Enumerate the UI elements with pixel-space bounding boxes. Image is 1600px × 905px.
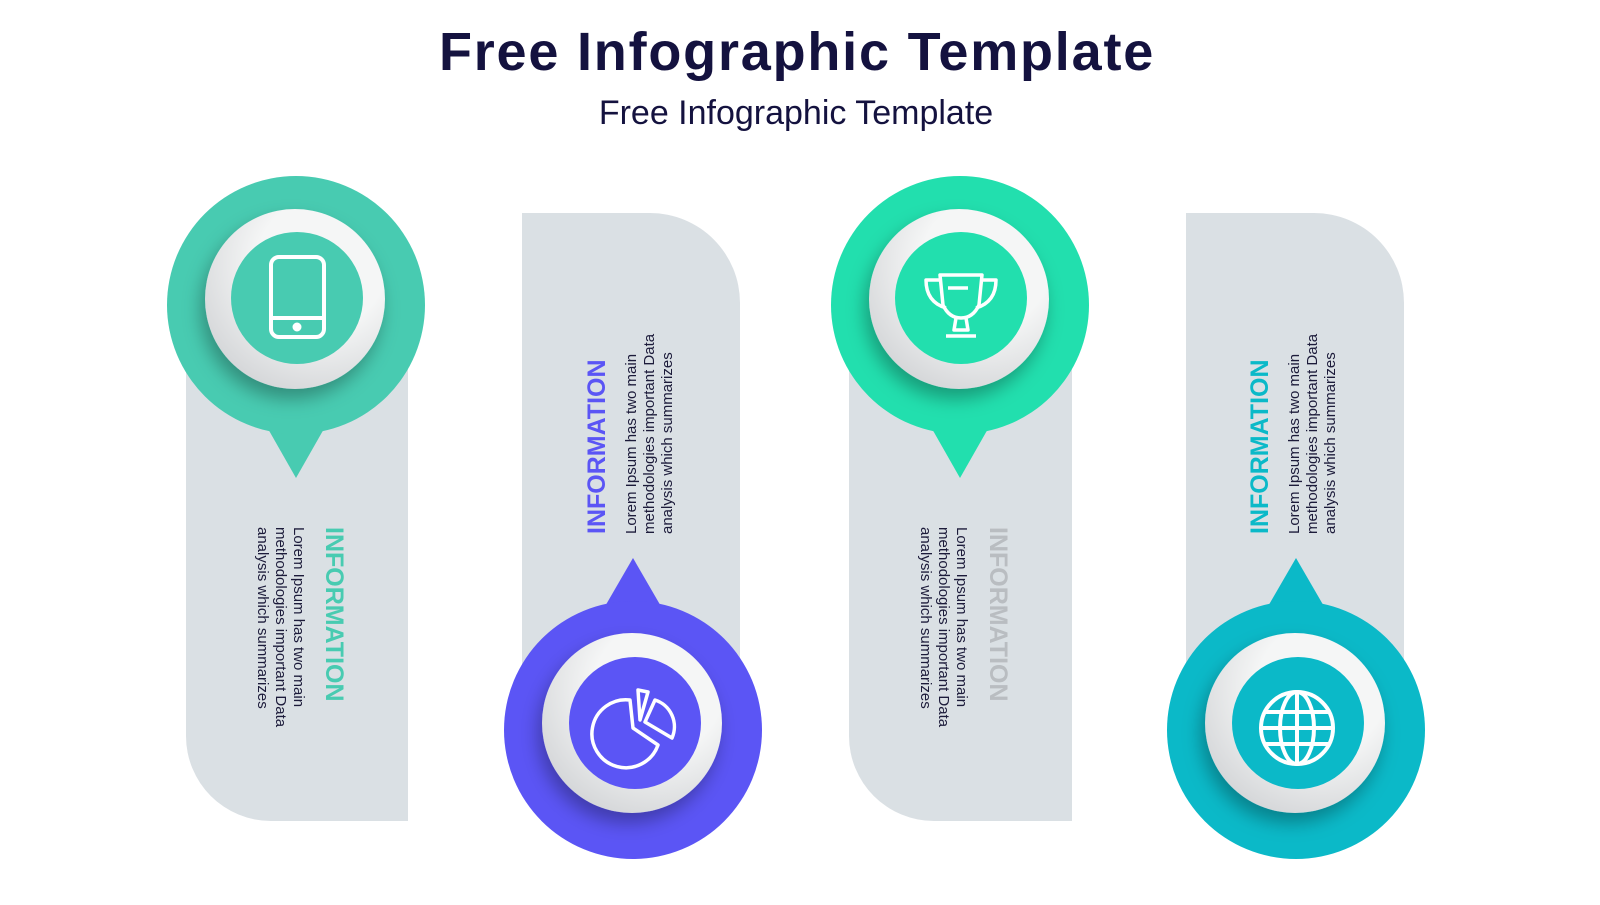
text 3: Lorem Ipsum has two main bbox=[953, 527, 970, 707]
text 2 bbox=[583, 333, 676, 534]
text 1: analysis which summarizes bbox=[254, 527, 271, 709]
text 2: analysis which summarizes bbox=[659, 352, 676, 534]
panel: card 1 bbox=[167, 176, 425, 821]
text 3: INFORMATION bbox=[984, 527, 1012, 702]
panel: card 4 bbox=[1167, 213, 1425, 859]
text 3: analysis which summarizes bbox=[917, 527, 934, 709]
icon: pie chart bbox=[592, 690, 674, 768]
panel: card 3 bbox=[831, 176, 1089, 821]
text 4: INFORMATION bbox=[1246, 359, 1274, 534]
icon: trophy bbox=[926, 275, 996, 336]
text 2: INFORMATION bbox=[583, 359, 611, 534]
marker 4 bbox=[1167, 558, 1425, 859]
icon: globe bbox=[1261, 692, 1333, 764]
text 1: Lorem Ipsum has two main bbox=[290, 527, 307, 707]
text 4: Lorem Ipsum has two main bbox=[1286, 354, 1303, 534]
text 4: methodologies important Data bbox=[1304, 333, 1321, 534]
text 1: INFORMATION bbox=[320, 527, 348, 702]
text 1 bbox=[254, 527, 348, 728]
text 3: methodologies important Data bbox=[935, 527, 952, 728]
icon: phone bbox=[271, 257, 324, 337]
text 4: analysis which summarizes bbox=[1322, 352, 1339, 534]
text 4 bbox=[1246, 333, 1339, 534]
text 2: Lorem Ipsum has two main bbox=[623, 354, 640, 534]
title: Free Infographic Template bbox=[439, 22, 1155, 82]
marker 2 bbox=[504, 558, 762, 859]
marker 3 bbox=[831, 176, 1089, 478]
panel: card 2 bbox=[504, 213, 762, 859]
text 1: methodologies important Data bbox=[272, 527, 289, 728]
subtitle: Free Infographic Template bbox=[599, 94, 993, 132]
text 2: methodologies important Data bbox=[641, 333, 658, 534]
text 3 bbox=[917, 527, 1012, 728]
marker 1 bbox=[167, 176, 425, 478]
